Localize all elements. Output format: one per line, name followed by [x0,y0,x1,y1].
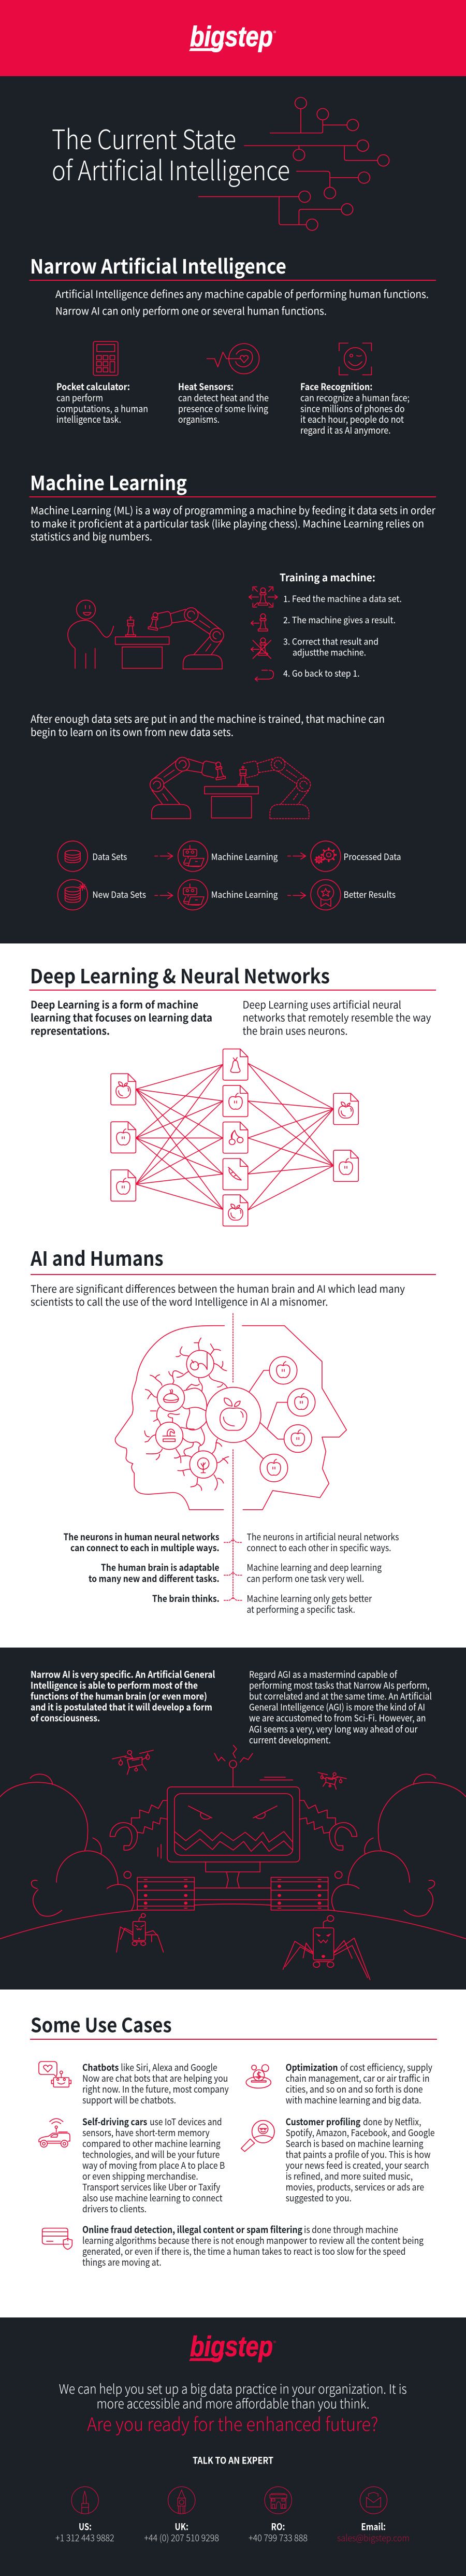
contact: US [55,2520,114,2544]
text: AGI description: AGI seems a very, very long way ahead of our [249,1722,418,1736]
text: pocket calculator: can perform [56,391,103,404]
text: pocket calculator: Pocket calculator: [56,380,130,393]
footer text: big data practice [59,2379,407,2413]
text: narrow AI versus AGI: Intelligence is able to perform most of the [31,1679,198,1692]
icon: UK Big Ben [168,2487,195,2514]
labels: flow text [92,850,401,900]
text: neural networks description: the brain uses neurons. [242,1023,348,1038]
icons inside human neurons [163,1353,209,1473]
text: training steps: 2. The machine gives a result. [283,613,396,626]
text: neural networks description [242,997,431,1038]
text: AGI description: Regard AGI as a mastermind capable of [249,1667,398,1681]
text: pocket calculator: intelligence task. [56,412,121,426]
contact: email: sales@bigstep.com [337,2531,410,2544]
use case: customer profiling: is refined, and more suited music, [286,2169,413,2183]
text: AGI description: current development. [249,1733,331,1747]
footer logo: ® [273,2339,276,2347]
divider: dashed centre line with branches [224,1313,242,1600]
ground line [0,1910,466,1939]
text: face recognition: Face Recognition: [300,380,373,393]
labels: flow text: Data Sets [92,850,127,863]
use case: online fraud detection: is done through machine [304,2223,398,2236]
use case: self-driving cars: also use machine learning to connect [82,2191,223,2205]
text: training steps: adjustthe machine. [293,646,366,658]
use case: online fraud detection: learning algorithms because there is not enough manpower to review all the content being [82,2234,424,2247]
header band with bigstep logo: bigstep [190,20,273,52]
human head outline [115,1326,224,1510]
text: machine learning intro: statistics and big numbers. [31,528,152,543]
use case: self-driving cars: way of moving from place A to place B [82,2158,225,2172]
use case: customer profiling: Search is based on machine learning [286,2137,424,2150]
footer text: big data practice: We can help you set up a big data practice in your organization. It is [59,2379,407,2398]
use case: optimization: Optimization [286,2060,338,2074]
text: heat sensors: Heat Sensors: [178,380,234,393]
text: narrow AI versus AGI [31,1667,215,1725]
icon: email envelope [360,2487,387,2514]
diagram: neural network of fruit documents [111,1049,358,1226]
use case: customer profiling: done by Netflix, [363,2115,421,2128]
text: face recognition [300,380,410,437]
text: machine learning intro: Machine Learning (ML) is a way of programming a machine by feeding it data sets in order [31,503,435,518]
labels: flow text: New Data Sets [92,888,146,900]
text: machine learning intro [31,503,435,543]
text: neural networks description: networks that remotely resemble the way [242,1009,431,1025]
contact: email [337,2520,410,2544]
use case: customer profiling: your news feed is created, your search [286,2158,429,2172]
labels: flow text: Machine Learning [211,850,278,863]
illustration: human head and AI head [115,1326,346,1510]
text: brain versus AI intro: There are significant differences between the human brain and AI which lead many [31,1281,405,1296]
server racks and beams [137,1878,328,1910]
use case: optimization: cities, and so on and so forth is done [286,2082,423,2096]
text: AGI description: performing most tasks that Narrow AIs perform, [249,1679,430,1692]
use case icons [39,2062,274,2250]
icon: heat sensor [207,344,259,374]
clouds and arms [0,1774,466,1916]
text: training steps [283,592,402,679]
central apple neuron [206,1387,261,1442]
text: AGI description: General Intelligence (AGI) is more the kind of AI [249,1700,425,1714]
icon: RO arch [265,2487,292,2514]
text: after training [31,711,385,739]
text: human brain traits: can connect to each in multiple ways. [70,1541,220,1554]
text: heat sensors: organisms. [178,412,220,426]
contact: UK: UK: [175,2520,188,2534]
header band with bigstep logo: ® [273,29,276,37]
text: face recognition: since millions of phones do [300,402,405,416]
text: artificial network traits: The neurons in artificial neural networks [246,1530,399,1543]
text: human brain traits: The neurons in human neural networks [63,1530,220,1543]
illustration: person teaching robot arm chess [68,600,224,669]
use case: customer profiling: Spotify, Amazon, Facebook, and Google [286,2126,435,2139]
text: AGI description [249,1667,432,1747]
text: machine learning intro: to make it proficient at a particular task (like playing chess). Machine Learning relies on [31,516,424,531]
text: training steps: 1. Feed the machine a data set. [283,592,402,605]
AI neurons [245,1356,315,1482]
icon: face recognition [339,343,372,375]
footer text: big data practice: more accessible and more affordable than you think. [96,2394,370,2413]
text: AGI description: we are accustomed to from Sci-Fi. However, an [249,1711,426,1725]
use case: self-driving cars: compared to other machine learning [82,2137,221,2150]
text: brain versus AI intro [31,1281,405,1309]
text: face recognition: can recognize a human face; [300,391,410,404]
text: narrow AI versus AGI: Narrow AI is very specific. An Artificial General [31,1667,215,1681]
use case: customer profiling [286,2115,435,2205]
text: deep learning definition: Deep Learning is a form of machine [31,997,198,1011]
use case: self-driving cars: technologies, and will be your future [82,2148,220,2161]
text: brain versus AI intro: scientists to call the use of the word Intelligence in AI a misnomer. [31,1294,328,1309]
use case: online fraud detection [82,2223,424,2269]
text: human brain traits: The brain thinks. [152,1592,220,1605]
heading: Deep Learning & Neural Networks: Deep Learning & Neural Networks [30,961,330,989]
text: deep learning definition: representations. [31,1023,110,1038]
icon: chatbot [39,2062,71,2087]
labels: flow text: Machine Learning [211,888,278,900]
contact: US: +1 312 443 9882 [55,2531,114,2544]
heading: Narrow Artificial Intelligence: Narrow Artificial Intelligence [30,251,286,279]
contact: email: Email: [361,2520,386,2534]
text: deep learning definition [31,997,212,1038]
text: narrow AI intro [55,286,429,318]
use case: self-driving cars: drivers to clients. [82,2202,147,2215]
use case: self-driving cars: Transport services like Uber or Taxify [82,2180,221,2194]
text: AGI description: but correlated and at the same time. An Artificial [249,1690,432,1703]
heading: AI and Humans: AI and Humans [30,1243,164,1271]
heading: Machine Learning: Machine Learning [30,467,187,496]
use case: self-driving cars [82,2115,225,2215]
illustration: robot arm playing its dashed copy [150,757,311,819]
text: human brain traits: to many new and different tasks. [89,1572,220,1585]
use case: optimization [286,2060,433,2107]
icon: coins optimization [246,2065,271,2088]
icons: flow circles and arrows [57,841,341,910]
use case: customer profiling: that paints a profile of you. This is how [286,2148,431,2161]
heading: training a machine: Training a machine: [280,569,375,584]
use case: self-driving cars: use IoT devices and [150,2115,222,2128]
text: narrow AI intro: Narrow AI can only perform one or several human functions. [55,303,327,318]
use case: optimization: chain management, car or air traffic in [286,2071,430,2085]
labels: flow text: Processed Data [344,850,401,863]
text: artificial network traits [246,1530,399,1616]
icon: US skyscraper [71,2487,98,2514]
use case: chatbots [82,2060,229,2107]
icon: circuit traces beside title [198,97,389,231]
contact: RO [249,2520,308,2544]
text: training steps: 3. Correct that result and [283,634,378,648]
text: narrow AI versus AGI: of consciousness. [31,1711,100,1725]
contact: US: US: [79,2520,92,2534]
title: The Current State [52,118,236,157]
use case: self-driving cars: sensors, have short-term memory [82,2126,210,2139]
text: artificial network traits: at performing a specific task. [246,1602,355,1616]
text: human brain traits [63,1530,220,1605]
text: narrow AI versus AGI: functions of the human brain (or even more) [31,1690,207,1703]
contact: UK [144,2520,219,2544]
text: pocket calculator: computations, a human [56,402,148,416]
small spider robot [116,1913,164,1952]
icon: customer profiling magnifier [241,2121,274,2152]
header band with bigstep logo [0,0,466,76]
text: face recognition: regard it as AI anymore. [300,423,390,437]
contact: RO: RO: [271,2520,285,2534]
use case: self-driving cars: or even shipping merchandise. [82,2169,198,2183]
use case: optimization: of cost efficiency, supply [340,2060,433,2074]
text: narrow AI versus AGI: and it is postulated that it will develop a form [31,1700,212,1714]
heading: Some Use Cases: Some Use Cases [31,2010,172,2038]
text: after training: begin to learn on its own from new data sets. [31,724,234,739]
text: training steps: 4. Go back to step 1. [283,666,359,679]
text: neural networks description: Deep Learning uses artificial neural [242,997,401,1011]
text: heat sensors: can detect heat and the [178,391,269,404]
icon: secure credit card [42,2228,72,2250]
flow diagram: data sets to results [57,841,401,910]
footer contact icons [71,2487,387,2514]
icon: calculator [93,341,118,375]
drones [112,1750,346,1790]
text: pocket calculator [56,380,148,426]
text: artificial network traits: Machine learning and deep learning [246,1561,382,1574]
monster screen and face [158,1745,300,1888]
use case: self-driving cars: Self-driving cars [82,2115,147,2128]
labels: flow text: Better Results [344,888,396,900]
text: face recognition: it each hour, people do not [300,412,404,426]
AI head outline [242,1326,346,1510]
use case: online fraud detection: generated, or even if there is, the time a human takes to react is too slow for the speed [82,2244,406,2258]
section: AI and humans text [30,1243,436,1309]
large spider robot [283,1915,370,1980]
text: heat sensors [178,380,269,426]
text: deep learning definition: learning that focuses on learning data [31,1009,212,1025]
use case: chatbots: support will be chatbots. [82,2093,176,2107]
contact: RO: +40 799 733 888 [249,2531,308,2544]
text: narrow AI intro: Artificial Intelligence defines any machine capable of performing human functions. [55,286,429,301]
footer callout: enhanced future question: Are you ready for the enhanced future? [87,2410,378,2437]
use case: customer profiling: movies, products, services or ads are [286,2180,424,2194]
use case: customer profiling: Customer profiling [286,2115,360,2128]
footer heading: talk to an expert: TALK TO AN EXPERT [193,2454,273,2467]
text: human brain traits: The human brain is adaptable [101,1561,220,1574]
title: of Artificial Intelligence [52,149,290,188]
section: deep learning heading and text [29,961,436,1038]
use case: online fraud detection: Online fraud detection, illegal content or spam filtering [82,2223,302,2236]
text: heat sensors: presence of some living [178,402,268,416]
illustration: AGI monster screen scene [0,1745,466,1980]
contact: UK: +44 (0) 207 510 9298 [144,2531,219,2544]
use case: customer profiling: suggested to you. [286,2191,352,2205]
text: after training: After enough data sets are put in and the machine is trained, that machine can [31,711,385,726]
use case: chatbots: Now are chat bots that are helping you [82,2071,228,2085]
icon: self-driving car [39,2119,70,2147]
title [52,118,290,188]
use case: chatbots: like Siri, Alexa and Google [121,2060,217,2074]
use case: chatbots: right now. In the future, most company [82,2082,229,2096]
use case: optimization: with machine learning and big data. [286,2093,421,2107]
text: artificial network traits: connect to each other in specific ways. [246,1541,391,1554]
footer logo: bigstep [190,2330,273,2363]
use case: chatbots: Chatbots [82,2060,119,2074]
use case: online fraud detection: things are moving at. [82,2255,162,2269]
icons: training steps [249,587,278,681]
human neurons and branches [144,1338,229,1491]
text: artificial network traits: Machine learning only gets better [246,1592,372,1605]
AI neuron apples [267,1362,308,1476]
text: artificial network traits: can perform one task very well. [246,1572,364,1585]
